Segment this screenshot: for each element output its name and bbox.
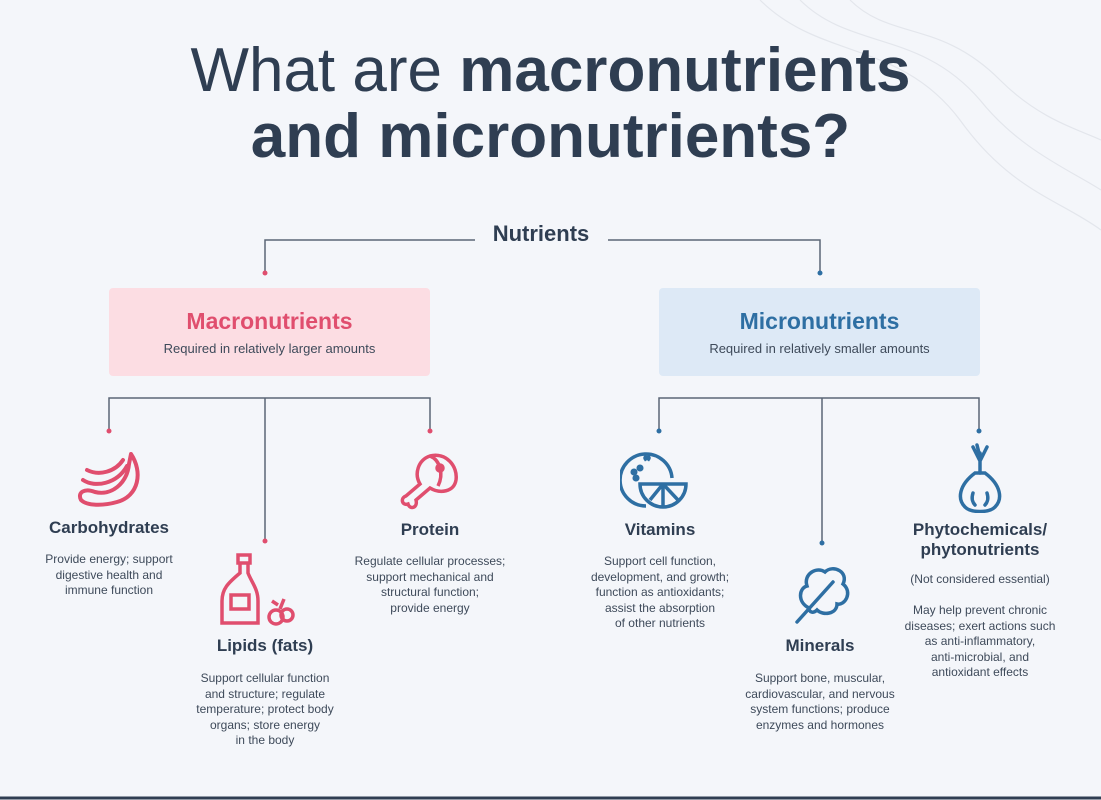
minerals: Support bone, muscular, bbox=[755, 671, 885, 685]
phytochemicals: antioxidant effects bbox=[932, 665, 1028, 679]
phytochemicals: May help prevent chronic bbox=[913, 603, 1047, 617]
protein: support mechanical and bbox=[366, 570, 494, 584]
vitamins: Vitamins bbox=[625, 520, 695, 539]
carbohydrates: digestive health and bbox=[56, 568, 162, 582]
carbohydrates bbox=[45, 518, 173, 597]
panel: macronutrients: Required in relatively larger amounts bbox=[164, 341, 375, 356]
vitamins: of other nutrients bbox=[615, 616, 705, 630]
lipids: temperature; protect body bbox=[196, 702, 334, 716]
minerals bbox=[745, 636, 895, 732]
lipids: and structure; regulate bbox=[205, 686, 325, 700]
panel: micronutrients: Required in relatively smaller amounts bbox=[709, 341, 930, 356]
vitamins bbox=[591, 520, 729, 630]
panel: macronutrients: Macronutrients bbox=[186, 308, 353, 334]
vitamins: Support cell function, bbox=[604, 554, 716, 568]
minerals: cardiovascular, and nervous bbox=[745, 686, 895, 700]
heading: Nutrients: Nutrients bbox=[493, 221, 589, 246]
carbohydrates: Carbohydrates bbox=[49, 518, 169, 537]
phytochemicals: anti-microbial, and bbox=[931, 650, 1029, 664]
icon: garlic bbox=[958, 443, 1002, 513]
icon: leaf bbox=[795, 567, 850, 624]
title: and micronutrients? bbox=[251, 102, 850, 171]
phytochemicals bbox=[905, 520, 1055, 679]
lipids: Lipids (fats) bbox=[217, 636, 313, 655]
lipids bbox=[196, 636, 334, 747]
carbohydrates: Provide energy; support bbox=[45, 552, 173, 566]
vitamins: development, and growth; bbox=[591, 570, 729, 584]
minerals: Minerals bbox=[786, 636, 854, 655]
title bbox=[190, 36, 911, 171]
title: What are macronutrients bbox=[190, 36, 911, 105]
protein: Regulate cellular processes; bbox=[355, 554, 505, 568]
panel: micronutrients: Micronutrients bbox=[740, 308, 899, 334]
vitamins: function as antioxidants; bbox=[596, 585, 724, 599]
phytochemicals: phytonutrients bbox=[920, 540, 1040, 559]
carbohydrates: immune function bbox=[65, 583, 153, 597]
vitamins: assist the absorption bbox=[605, 600, 715, 614]
icon: meat bbox=[400, 454, 458, 510]
lipids: organs; store energy bbox=[210, 718, 320, 732]
panel: micronutrients bbox=[659, 288, 980, 376]
lipids: Support cellular function bbox=[201, 671, 329, 685]
lipids: in the body bbox=[236, 733, 294, 747]
protein: provide energy bbox=[390, 600, 470, 614]
protein: structural function; bbox=[381, 585, 479, 599]
protein bbox=[355, 520, 505, 614]
icon: banana bbox=[78, 452, 140, 507]
icon: orange bbox=[620, 452, 688, 509]
phytochemicals: diseases; exert actions such bbox=[905, 618, 1055, 632]
phytochemicals: as anti-inflammatory, bbox=[925, 634, 1035, 648]
minerals: system functions; produce bbox=[750, 702, 890, 716]
phytochemicals: Phytochemicals/ bbox=[913, 520, 1047, 539]
phytochemicals: (Not considered essential) bbox=[910, 572, 1050, 586]
panel: macronutrients bbox=[109, 288, 430, 376]
icon: oil bottle bbox=[220, 553, 295, 626]
minerals: enzymes and hormones bbox=[756, 718, 884, 732]
protein: Protein bbox=[401, 520, 459, 539]
